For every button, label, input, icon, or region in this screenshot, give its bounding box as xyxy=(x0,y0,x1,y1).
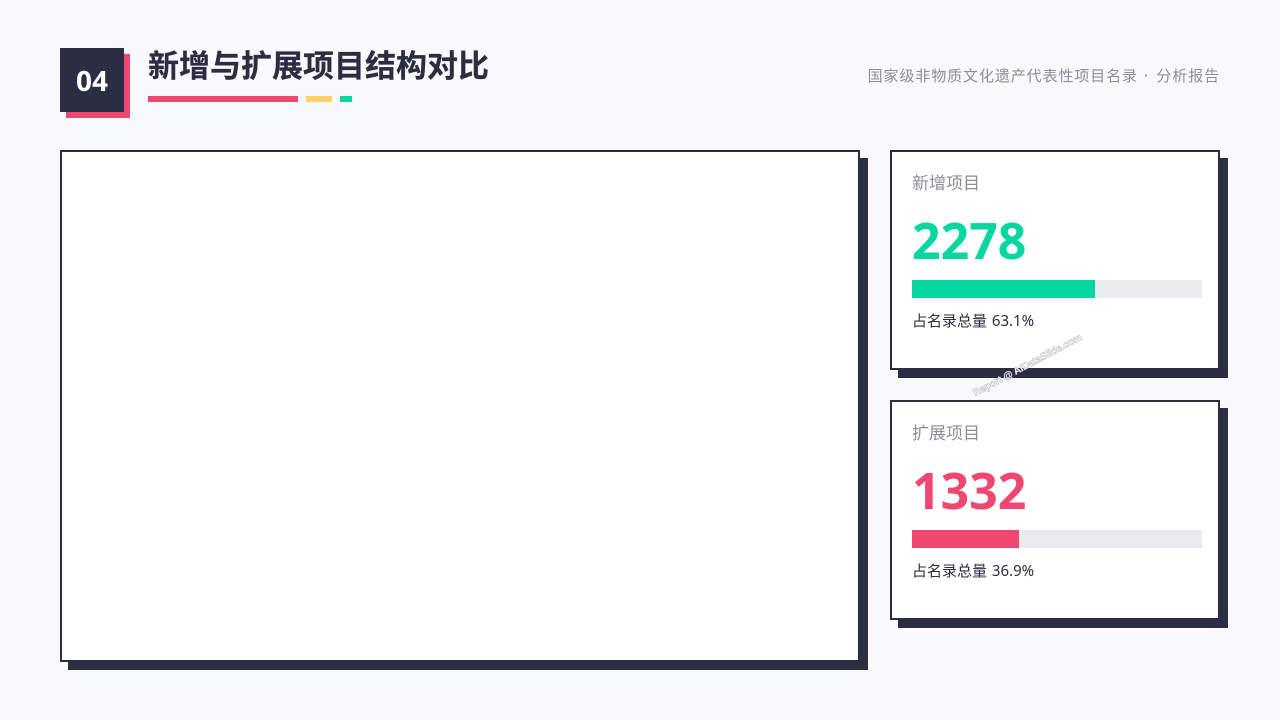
title: 新增与扩展项目结构对比 xyxy=(148,45,489,87)
big number: 1332 xyxy=(912,456,1026,524)
card label: 扩展项目 xyxy=(912,421,980,444)
report subtitle: 国家级非物质文化遗产代表性项目名录 · 分析报告 xyxy=(868,66,1220,86)
progress bar xyxy=(912,530,1202,548)
section number badge xyxy=(60,48,124,112)
badge number: 04 xyxy=(76,62,108,100)
panel: expanded projects card xyxy=(890,400,1220,620)
watermark: Report @ AIDataSlide.com xyxy=(972,332,1084,399)
panel: new projects card xyxy=(890,150,1220,370)
share text: 占名录总量 63.1% xyxy=(912,311,1034,331)
card label: 新增项目 xyxy=(912,171,980,194)
panel: empty chart area xyxy=(60,150,860,662)
progress bar xyxy=(912,280,1202,298)
big number: 2278 xyxy=(912,206,1026,274)
title accent bars xyxy=(148,96,352,102)
share text: 占名录总量 36.9% xyxy=(912,561,1034,581)
